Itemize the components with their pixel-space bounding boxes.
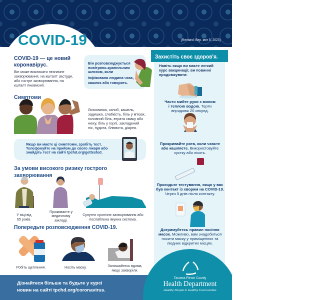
prevention labels: Носіть маску. <box>64 266 87 270</box>
prevention labels <box>16 264 142 272</box>
panel: know your health <box>151 50 228 266</box>
heading: high risk <box>14 166 108 179</box>
tip: cover coughs: хустку або лікоть. <box>174 150 206 155</box>
intro heading: COVID-19 — це новий <box>14 55 71 62</box>
risk labels: медичному <box>52 214 71 218</box>
callout: how it spreads <box>84 55 152 89</box>
symptoms text <box>88 108 146 130</box>
callout: get tested: Якщо ви маєте ці симптоми, зробіть тест. <box>26 142 102 146</box>
prevention labels: Залишайтесь вдома, <box>108 264 142 268</box>
icon: washing hands <box>178 83 202 98</box>
footer band <box>0 275 232 300</box>
icon: three people with symptoms <box>14 98 80 134</box>
heading banner: Захистіть своє здоров'я. <box>155 54 218 60</box>
heading: high risk: захворювання <box>14 173 52 179</box>
callout: get tested <box>14 137 146 161</box>
icon: test kit <box>175 158 204 180</box>
department tagline: Healthy People in Healthy Communities <box>164 288 217 292</box>
icon: person resting in bed <box>108 239 133 261</box>
tip: get tested after exposure <box>156 182 224 196</box>
heading: prevent spread: Попередьте розповсюдження COVID-19. <box>14 225 118 231</box>
risk labels: 65 років. <box>17 218 31 222</box>
tip: wash hands: впродовж 20 секунд. <box>171 108 209 113</box>
tip: cover coughs <box>160 141 221 155</box>
tip: follow mask guidance <box>158 227 222 246</box>
tip: get tested after exposure: Проходьте тестування, якщо у вас <box>157 182 224 187</box>
icon: care home resident <box>53 176 68 208</box>
intro heading <box>14 55 71 68</box>
intro text <box>14 70 73 88</box>
footer text: новин на сайті tpchd.org/coronavirus. <box>17 286 105 294</box>
panel intro: курс вакцинації, ви повинні <box>159 68 211 72</box>
icon: person with mask <box>62 237 95 261</box>
icon: person sneezing into tissue <box>183 113 197 132</box>
intro text: кшталт пневмонії. <box>14 84 45 88</box>
prevention labels: якщо захворіли. <box>112 268 138 272</box>
footer text: Дізнайтеся більше та будьте у курсі <box>17 280 102 286</box>
icon: elderly person <box>15 176 34 208</box>
prevention labels: Робіть щеплення. <box>16 266 46 270</box>
tip: follow mask guidance: носити маску у приміщеннях та <box>162 236 219 241</box>
icon: vaccine and bandage <box>18 235 45 262</box>
intro text: Він може викликати незначне <box>14 70 64 74</box>
heading: high risk: За умови високого ризику гострого <box>14 166 108 172</box>
tip: get tested after exposure: Через 5 днів після контакту. <box>165 191 215 196</box>
intro heading: коронавірус. <box>14 62 48 68</box>
tip: wash hands <box>164 99 216 113</box>
callout: how it spreads: повітряно-крапельним <box>88 66 130 70</box>
health department seal <box>143 249 232 300</box>
tip: follow mask guidance: людних відкритих місцях. <box>167 240 213 246</box>
symptoms text: задишка, слабкість, біль у м'язах, <box>88 112 146 116</box>
symptoms text: Лихоманка, озноб, кашель, <box>88 108 134 112</box>
symptoms text: нюху, біль у горлі, закладений <box>88 122 139 126</box>
callout: how it spreads: Він розповсюджується <box>88 62 130 66</box>
department name: Tacoma-Pierce County <box>174 276 207 280</box>
title: COVID-19 <box>18 33 87 49</box>
tip: wash hands: Часто мийте руки з милом <box>164 99 216 104</box>
callout: how it spreads: шляхом, коли <box>88 70 114 74</box>
risk labels: закладі. <box>54 218 68 222</box>
tip: cover coughs: Прикривайте рота, коли чхаєте <box>160 141 221 146</box>
tip: cover coughs: або кашляєте. Використовуйте <box>161 146 219 150</box>
icon: department logo <box>183 262 198 274</box>
symptoms text: головний біль, втрата смаку або <box>88 117 143 121</box>
department title: Health Department <box>163 280 217 288</box>
tip: follow mask guidance: масок. Можливо, вам знадобиться <box>158 232 222 236</box>
intro text: захворювання, на кшталт застуди, <box>14 74 73 78</box>
icon: phone with doctor <box>122 137 137 161</box>
heading banner <box>151 50 228 62</box>
tip: get tested after exposure: був контакт із хворим на COVID-19. <box>156 186 224 192</box>
risk labels: Супутнє хронічне захворювання або <box>83 213 143 217</box>
risk labels: Проживаєте у <box>49 210 73 214</box>
tip: follow mask guidance: Дотримуйтесь правил носіння <box>161 227 219 232</box>
symptoms text: ніс, нудота, блювота, діарея. <box>88 126 137 130</box>
callout: get tested: знайдіть тест на сайті tpchd.org/gettested. <box>26 150 103 154</box>
panel intro: Навіть якщо ви маєте легкий <box>159 64 214 68</box>
heading: symptoms: Симптоми <box>14 95 41 101</box>
revision date: (Revised: Вер. квіт 5, 2023) <box>181 38 221 42</box>
header banner <box>0 0 232 47</box>
panel intro <box>159 64 214 77</box>
callout: how it spreads: кашляє або говорить. <box>88 81 128 85</box>
footer text <box>17 280 105 294</box>
tip: wash hands: і теплою водою. Терти <box>168 104 212 108</box>
icon: person coughing <box>134 59 152 87</box>
intro text: або гостре захворювання, на <box>14 79 65 83</box>
risk labels: У віці від <box>17 213 32 217</box>
icon: person with mask and calendar <box>176 201 205 227</box>
panel intro: продовжувати: <box>159 73 188 77</box>
risk labels <box>17 210 143 222</box>
callout: get tested: Телефонуйте на прийом до свого лікаря або <box>26 146 108 150</box>
icon: hospital bed patient <box>82 178 146 208</box>
callout: how it spreads: інфікована людина чхає, <box>88 76 134 80</box>
risk labels: послаблена імунна система. <box>89 218 137 222</box>
